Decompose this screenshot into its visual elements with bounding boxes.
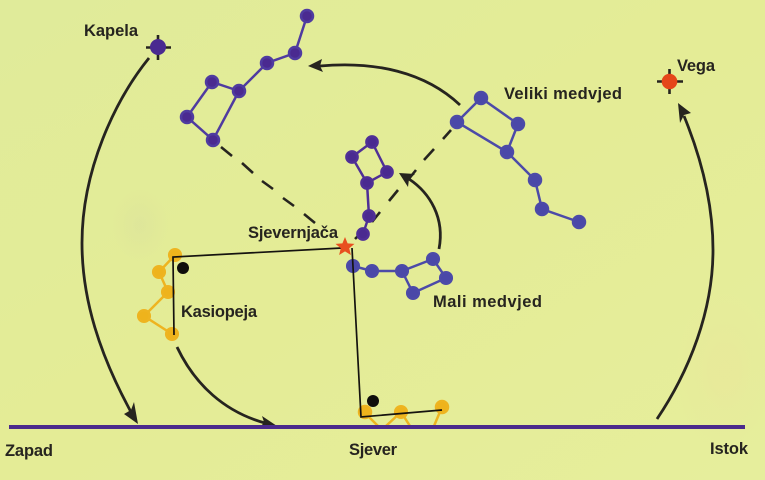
dashed pointer line to Veliki medvjed, upper left: [221, 147, 315, 223]
label: Mali medvjed: Mali medvjed: [433, 293, 542, 311]
arrow: Vega rotation: [657, 103, 713, 419]
label: Veliki medvjed: Veliki medvjed: [504, 85, 622, 103]
icon: black dot, upper: [177, 262, 189, 274]
arrow: Veliki medvjed rotation: [308, 59, 460, 105]
constellation: Veliki medvjed (upper left position): [181, 10, 313, 146]
label: Istok: Istok: [710, 440, 749, 458]
label: Sjevernjača: Sjevernjača: [248, 224, 339, 242]
arrow: Kapela to the horizon: [82, 58, 149, 424]
star: Vega: [657, 69, 683, 94]
pointer construction lines: [173, 248, 442, 417]
label: Kapela: Kapela: [84, 22, 139, 40]
label: Zapad: Zapad: [5, 442, 53, 460]
arrow: Mali medvjed rotation: [399, 173, 440, 249]
constellation: Kasiopeja (on the horizon): [359, 401, 448, 426]
arrow: Kasiopeja to the horizon: [177, 347, 277, 428]
label: Sjever: Sjever: [349, 441, 398, 459]
label: Vega: Vega: [677, 57, 716, 75]
constellation: Mali medvjed (upper, rotated position): [346, 136, 393, 240]
icon: pole star: [336, 237, 354, 255]
constellation: Kasiopeja (upper position): [138, 249, 181, 340]
constellation: Veliki medvjed (right position): [451, 92, 585, 228]
icon: black dot, lower: [367, 395, 379, 407]
label: Kasiopeja: Kasiopeja: [181, 303, 258, 321]
constellation: Mali medvjed (lower position): [347, 253, 452, 299]
star: Kapela: [146, 35, 171, 60]
dashed pointer line to Veliki medvjed, right: [355, 130, 451, 239]
horizon line: [9, 425, 745, 429]
